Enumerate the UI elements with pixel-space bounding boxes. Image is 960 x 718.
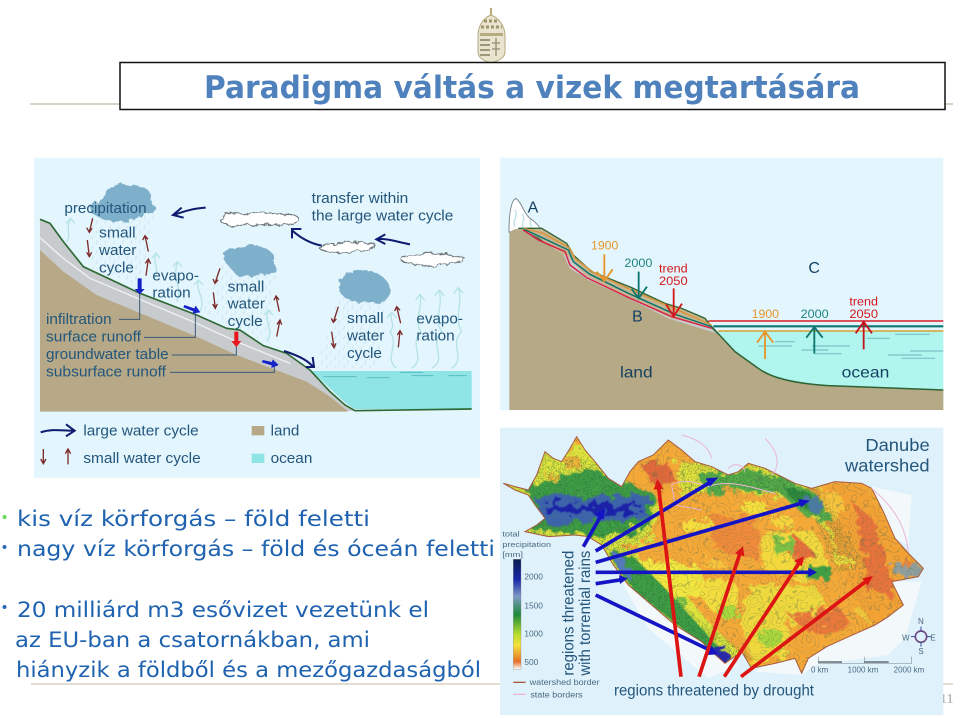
diagram labels: cycle (99, 260, 134, 276)
sea level lines (708, 321, 943, 331)
diagram labels: precipitation (64, 201, 147, 217)
footer rule (31, 683, 500, 685)
high precipitation core (535, 497, 825, 663)
diagram labels: the large water cycle (312, 209, 453, 225)
diagram labels: 1900 (591, 238, 619, 252)
legend: large water cycle (83, 423, 199, 439)
scale bar: 1000 km (848, 666, 879, 675)
diagram labels: ration (152, 285, 191, 301)
diagram labels: 1900 (752, 307, 779, 321)
panel background (500, 428, 943, 715)
compass: W (902, 634, 910, 643)
panel: water cycle diagram (34, 158, 480, 478)
map labels: regions threatened (561, 551, 578, 676)
bullet: small water cycle: kis víz körforgás – föld feletti (17, 507, 370, 531)
colour scale: 2000 (524, 571, 543, 581)
bullet: large water cycle: nagy víz körforgás – föld és óceán feletti (17, 537, 495, 561)
white surrounding land (612, 487, 922, 678)
panel background (34, 158, 480, 478)
footer rule right (942, 683, 953, 685)
diagram labels: infiltration (46, 312, 112, 328)
bullet: rainwater drained: hiányzik a földből és a mezőgazdaságból (16, 658, 481, 682)
colour scale: [mm] (502, 550, 523, 559)
diagram labels: 2050 (659, 274, 688, 288)
land (40, 250, 348, 412)
diagram labels: evapo- (152, 268, 199, 284)
legend: ocean (271, 451, 312, 467)
colour scale (502, 530, 551, 669)
ocean (708, 332, 943, 398)
diagram labels: subsurface runoff (46, 365, 167, 381)
icon: Hungarian coat of arms (478, 8, 505, 63)
diagram labels: 2050 (849, 307, 878, 321)
diagram labels: surface runoff (46, 329, 142, 345)
colour scale: precipitation (502, 540, 551, 549)
coastline (712, 327, 943, 390)
legend: land (271, 423, 299, 439)
diagram labels: evapo- (416, 311, 463, 327)
diagram labels: small (99, 226, 136, 242)
compass: E (930, 634, 936, 643)
legend (41, 423, 312, 467)
header rule (30, 103, 953, 105)
process markers and leader lines (119, 278, 279, 372)
map legend: watershed border (529, 677, 600, 687)
grey groundwater wedge (563, 255, 717, 333)
panel: Danube watershed precipitation map (495, 425, 943, 715)
ocean ripples (323, 372, 467, 378)
diagram labels: transfer within (312, 191, 408, 207)
diagram labels (46, 191, 463, 381)
bullet: rainwater drained: 20 milliárd m3 esővizet vezetünk el (17, 598, 429, 622)
diagram labels: 2000 (624, 256, 653, 270)
legend: small water cycle (83, 451, 201, 467)
small cycle arrows (87, 218, 402, 348)
diagram labels: C (808, 260, 820, 277)
terrain outline (40, 219, 472, 411)
diagram labels: trend (659, 261, 688, 275)
precipitation map (503, 434, 924, 674)
colour scale: total (502, 530, 520, 539)
diagram labels: ocean (842, 364, 889, 381)
diagram labels: cycle (228, 314, 263, 330)
compass (902, 617, 936, 656)
diagram labels: water (346, 328, 384, 344)
diagram labels: small (228, 279, 264, 295)
text block: bullet points (2, 507, 495, 682)
colour scale: 1500 (524, 600, 543, 610)
scale bar (811, 657, 925, 675)
diagram labels: groundwater table (46, 347, 169, 363)
bullet: rainwater drained (2, 598, 481, 682)
compass: S (918, 647, 924, 656)
large cycle arrows (173, 208, 410, 367)
colour scale: 500 (524, 657, 539, 667)
blue arrows: torrential rain regions (583, 477, 817, 655)
scale bar: 2000 km (894, 666, 925, 675)
diagram labels: A (528, 199, 539, 216)
contour overlay (510, 440, 922, 672)
soil layer (518, 228, 717, 333)
map labels: regions threatened by drought (614, 683, 815, 700)
icon: glacier (509, 198, 540, 232)
diagram labels: small (347, 311, 384, 327)
diagram labels: ration (416, 328, 455, 344)
watershed border (503, 437, 923, 673)
state borders (672, 435, 908, 552)
diagram labels: land (620, 364, 653, 381)
clouds: rain clouds (90, 184, 391, 303)
map labels: with torrential rains (577, 550, 594, 677)
ocean (312, 371, 472, 409)
diagram labels: water (98, 243, 136, 259)
panel: sea level and land water trend diagram (500, 158, 943, 410)
evaporation arrows (66, 218, 463, 368)
diagram labels: 2000 (801, 307, 829, 321)
map legend (513, 677, 600, 699)
map labels: watershed (844, 455, 930, 475)
mountain contour overlay (508, 452, 868, 660)
groundwater table line (40, 238, 290, 363)
colour scale: 1000 (524, 629, 543, 639)
bullet: rainwater drained: az EU-ban a csatornákban, ami (15, 628, 370, 652)
map labels (561, 435, 930, 700)
title: Paradigma váltás a vizek megtartására (204, 70, 860, 106)
diagram labels: B (632, 309, 643, 326)
land (509, 229, 943, 410)
rain areas (90, 213, 387, 368)
diagram labels (528, 199, 889, 381)
groundwater layer (40, 219, 353, 411)
diagram labels: cycle (347, 346, 382, 362)
water ripples (758, 334, 943, 358)
slope trend lines (523, 228, 712, 328)
year arrows (597, 254, 872, 359)
page number: 11 (940, 692, 953, 707)
compass: N (918, 617, 924, 626)
map labels: Danube (865, 435, 930, 455)
red arrows: drought regions (654, 479, 873, 677)
title box (120, 62, 945, 110)
diagram labels: trend (849, 295, 878, 309)
panel background (500, 158, 943, 410)
diagram labels: water (227, 297, 265, 313)
clouds: white transfer clouds (221, 212, 465, 267)
map legend: state borders (530, 689, 583, 699)
scale bar: 0 km (811, 666, 829, 675)
